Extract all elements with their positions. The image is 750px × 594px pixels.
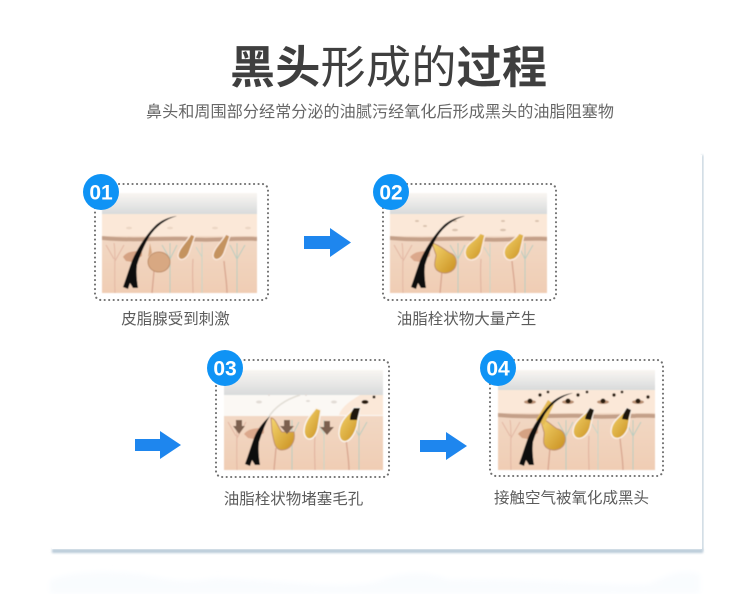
title: 黑头形成的过程 bbox=[230, 42, 547, 93]
step 4 label: 接触空气被氧化成黑头 bbox=[494, 489, 649, 507]
arrow 1 bbox=[304, 228, 351, 257]
step 1 badge: 01 bbox=[89, 182, 113, 204]
step 3 skin illustration bbox=[224, 370, 383, 470]
step 4 panel bbox=[480, 350, 663, 507]
step 4 badge bbox=[480, 350, 516, 386]
step 4 badge: 04 bbox=[486, 358, 510, 380]
step 1 label: 皮脂腺受到刺激 bbox=[121, 310, 230, 328]
step 1 panel bbox=[83, 174, 268, 328]
step 1 skin illustration bbox=[102, 193, 257, 293]
step 4 skin illustration bbox=[498, 370, 655, 470]
arrow 3 bbox=[420, 432, 467, 460]
step 3 label: 油脂栓状物堵塞毛孔 bbox=[224, 490, 364, 508]
step 2 skin illustration bbox=[390, 193, 547, 293]
background: faint wave at page bottom bbox=[50, 572, 700, 594]
step 2 badge: 02 bbox=[379, 182, 403, 204]
step 2 label: 油脂栓状物大量产生 bbox=[397, 310, 536, 328]
step 4 dotted border bbox=[490, 360, 663, 476]
arrow 2 bbox=[135, 431, 181, 459]
step 3 badge bbox=[207, 350, 243, 386]
step 2 panel bbox=[373, 174, 556, 328]
step 2 dotted border bbox=[383, 184, 556, 300]
step 3 dotted border bbox=[216, 360, 389, 477]
step 1 dotted border bbox=[95, 184, 268, 300]
step 2 badge bbox=[373, 174, 409, 210]
card frame with shadow bbox=[52, 155, 704, 553]
step 3 badge: 03 bbox=[213, 358, 237, 380]
step 1 badge bbox=[83, 174, 119, 210]
subtitle: 鼻头和周围部分经常分泌的油腻污经氧化后形成黑头的油脂阻塞物 bbox=[146, 103, 614, 121]
step 3 panel bbox=[207, 350, 389, 508]
